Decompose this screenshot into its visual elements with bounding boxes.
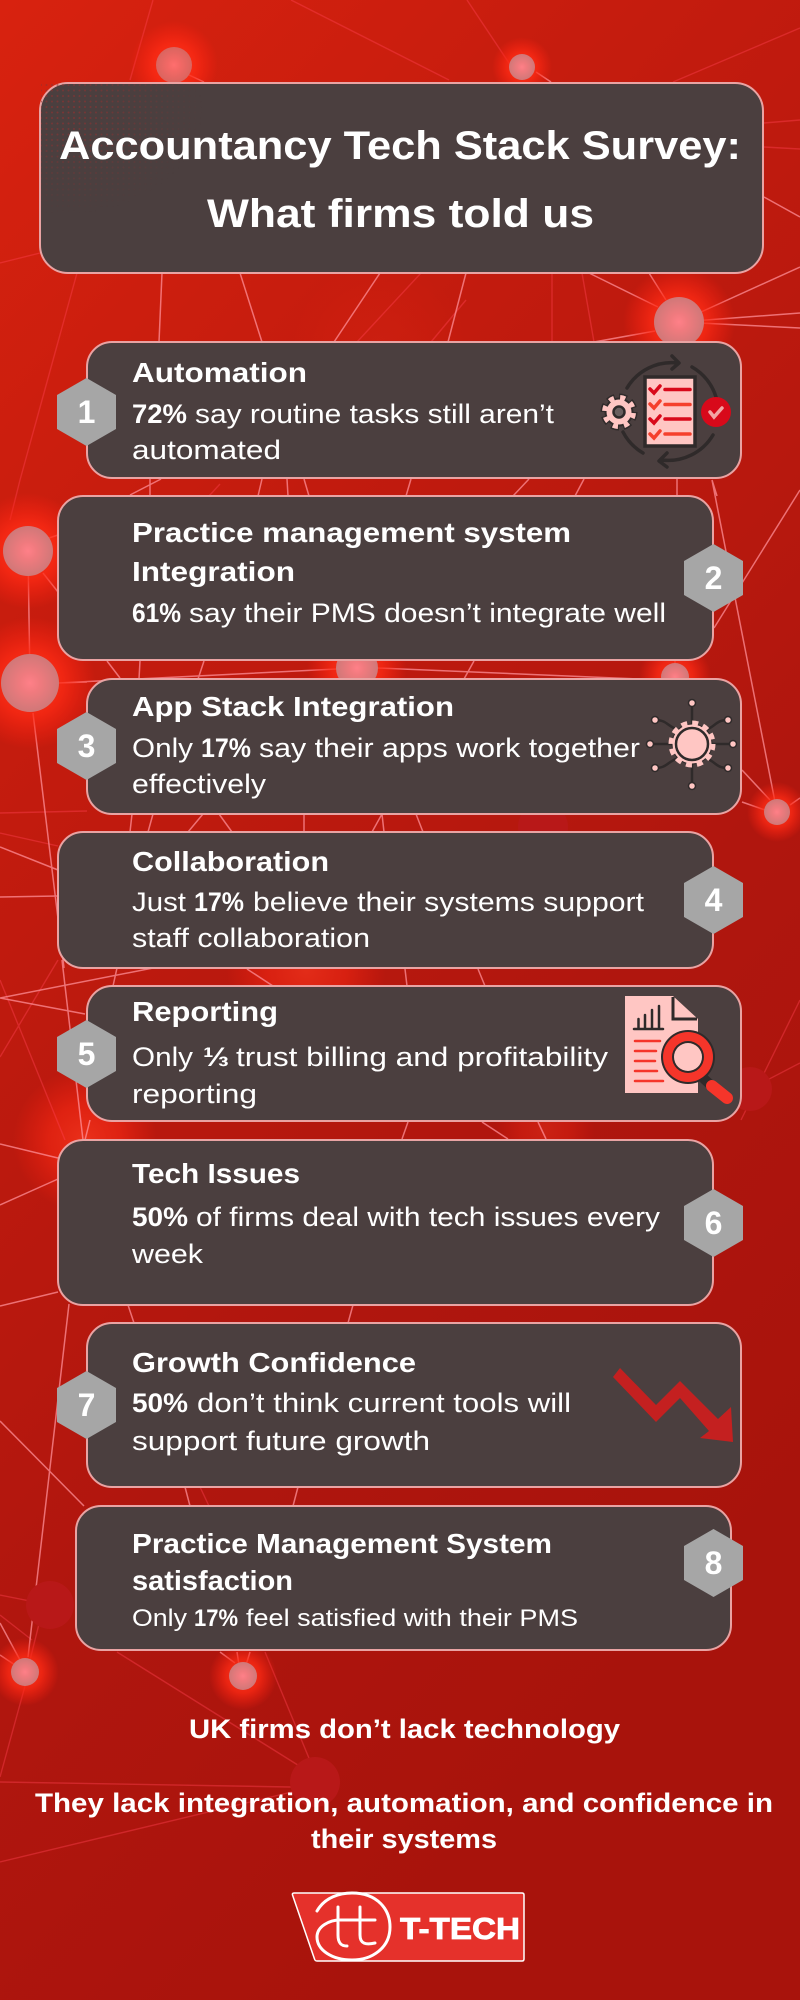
card 6: tech issues [58, 1140, 743, 1305]
closing line 1: UK firms don’t lack technology [189, 1714, 620, 1744]
body text: say routine tasks still aren’t [195, 399, 555, 429]
heading: Integration [132, 556, 295, 587]
body text: Only [132, 1605, 187, 1632]
closing line 2: their systems [311, 1824, 497, 1854]
heading: Practice management system [132, 517, 571, 548]
body text: say their PMS doesn’t integrate well [189, 598, 666, 628]
card 5: reporting [57, 986, 741, 1121]
title panel [40, 83, 763, 273]
body text: 50% [132, 1202, 188, 1232]
title line 2: What firms told us [207, 192, 594, 236]
title line 1: Accountancy Tech Stack Survey: [59, 124, 741, 168]
card 1: automation [57, 342, 741, 478]
number badge 2: 2 [705, 560, 722, 596]
body text: staff collaboration [132, 923, 370, 953]
icon: connected hub [646, 700, 736, 790]
body text: of firms deal with tech issues every [196, 1202, 661, 1232]
number badge 7 [57, 1371, 116, 1439]
body text: 50% [132, 1388, 188, 1418]
card 7: growth confidence [57, 1323, 741, 1487]
number badge 1: 1 [78, 394, 95, 430]
closing statement [35, 1714, 773, 1854]
number badge 3: 3 [78, 728, 95, 764]
number badge 6 [684, 1189, 743, 1257]
logo: T-Tech: T-TECH [400, 1911, 520, 1946]
body text: 72% [132, 399, 187, 429]
body text: ⅓ [203, 1042, 229, 1072]
number badge 4 [684, 866, 743, 934]
number badge 4: 4 [705, 882, 723, 918]
card 4: collaboration [58, 832, 743, 968]
closing line 2: They lack integration, automation, and confidence in [35, 1788, 773, 1818]
heading: Automation [132, 357, 307, 388]
number badge 5: 5 [78, 1036, 95, 1072]
icon: checklist cycle [604, 356, 731, 467]
card 3: app stack integration [57, 679, 741, 814]
number badge 1 [57, 378, 116, 446]
body text: say their apps work together [259, 733, 640, 763]
body text: 17% [194, 887, 244, 917]
heading: Reporting [132, 996, 278, 1027]
body text: 61% [132, 598, 181, 628]
body text: Just [132, 887, 187, 917]
body text: 17% [201, 733, 251, 763]
heading: satisfaction [132, 1565, 293, 1596]
body text: week [131, 1239, 204, 1269]
number badge 7: 7 [78, 1387, 95, 1423]
heading: App Stack Integration [132, 691, 454, 722]
body text: Only [132, 733, 194, 763]
body text: Only [132, 1042, 194, 1072]
icon: falling arrow [613, 1368, 733, 1442]
heading: Growth Confidence [132, 1347, 416, 1378]
number badge 6: 6 [705, 1205, 722, 1241]
body text: automated [132, 435, 281, 465]
card 8: practice management system satisfaction [76, 1506, 743, 1650]
body text: feel satisfied with their PMS [246, 1605, 578, 1632]
body text: effectively [132, 769, 267, 799]
heading: Tech Issues [132, 1158, 300, 1189]
body text: support future growth [132, 1426, 430, 1456]
body text: don’t think current tools will [197, 1388, 571, 1418]
body text: reporting [132, 1079, 257, 1109]
number badge 5 [57, 1020, 116, 1088]
body text: 17% [194, 1605, 238, 1632]
body text: believe their systems support [253, 887, 645, 917]
icon: report with magnifier [625, 996, 727, 1098]
logo: T-Tech [292, 1893, 524, 1961]
body text: trust billing and profitability [236, 1042, 609, 1072]
heading: Practice Management System [132, 1528, 552, 1559]
number badge 2 [684, 544, 743, 612]
card 2: practice management system integration [58, 496, 743, 660]
number badge 8 [684, 1529, 743, 1597]
heading: Collaboration [132, 846, 329, 877]
number badge 8: 8 [705, 1545, 722, 1581]
number badge 3 [57, 712, 116, 780]
